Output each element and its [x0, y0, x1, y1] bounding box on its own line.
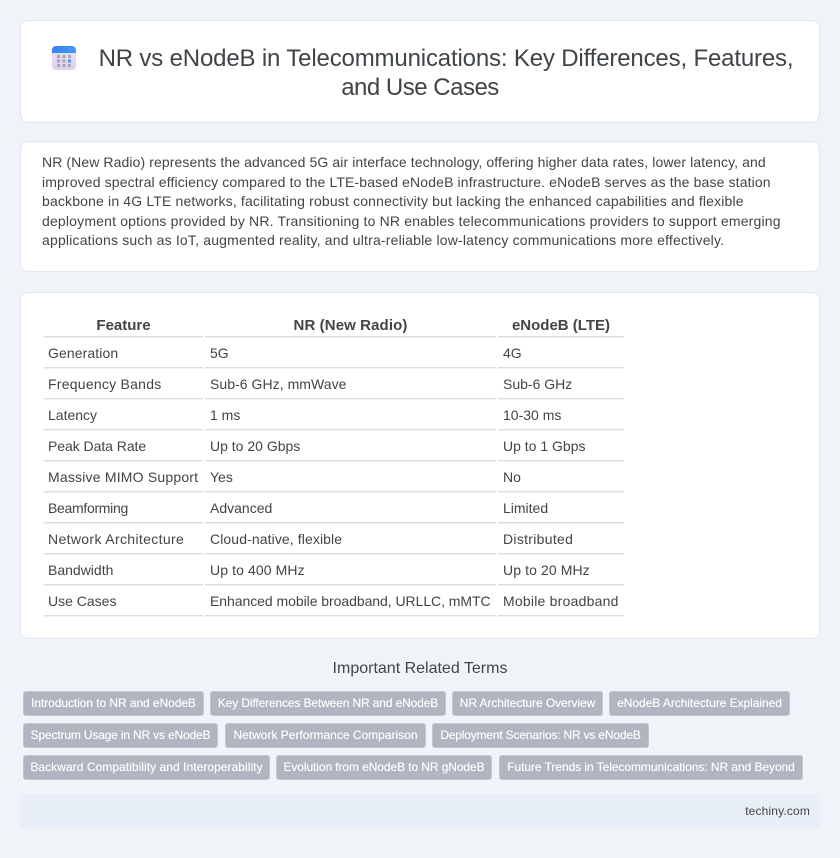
- table rows: Up to 20 MHz: [503, 562, 590, 578]
- table rows: Network Architecture: [48, 531, 184, 547]
- title: and Use Cases: [341, 74, 499, 101]
- related term tags: Spectrum Usage in NR vs eNodeB: [31, 728, 210, 742]
- related term tags: Introduction to NR and eNodeB: [31, 696, 196, 710]
- table rows: Up to 20 Gbps: [210, 438, 300, 454]
- table rows: Beamforming: [48, 500, 128, 516]
- text block: intro paragraph: backbone in 4G LTE networks, facilitating robust connectivity but lacking the enhanced capabilities and flexible: [42, 193, 744, 209]
- related term tags: Network Performance Comparison: [233, 728, 418, 742]
- text block: intro paragraph: deployment options provided by NR. Transitioning to NR enables telecommunications providers to support emerging: [42, 213, 781, 229]
- table rows: Up to 1 Gbps: [503, 438, 586, 454]
- text block: intro paragraph: improved spectral efficiency compared to the LTE-based eNodeB infrastructure. eNodeB serves as the base station: [42, 174, 771, 190]
- table header: Feature: [96, 317, 151, 334]
- text block: intro paragraph: NR (New Radio) represents the advanced 5G air interface technology, offering higher data rates, lower latency, and: [42, 154, 766, 170]
- table rows: Sub-6 GHz, mmWave: [210, 376, 346, 392]
- table rows: Up to 400 MHz: [210, 562, 305, 578]
- table rows: Enhanced mobile broadband, URLLC, mMTC: [210, 593, 491, 609]
- heading: important related terms: Important Related Terms: [333, 660, 507, 677]
- table rows: [44, 336, 624, 617]
- related term tags: NR Architecture Overview: [460, 696, 595, 710]
- title: [99, 45, 793, 101]
- table rows: No: [503, 469, 521, 485]
- table header: [96, 317, 610, 334]
- table rows: Generation: [48, 345, 118, 361]
- table rows: Frequency Bands: [48, 376, 161, 392]
- table rows: Distributed: [503, 531, 573, 547]
- footer credit: techiny.com: [745, 804, 810, 818]
- table rows: Latency: [48, 407, 97, 423]
- footer bar: [20, 794, 820, 828]
- related term tags: Backward Compatibility and Interoperability: [30, 760, 263, 774]
- related term tags: Future Trends in Telecommunications: NR and Beyond: [507, 760, 795, 774]
- table rows: 5G: [210, 345, 229, 361]
- table rows: 1 ms: [210, 407, 240, 423]
- table rows: Peak Data Rate: [48, 438, 146, 454]
- table rows: Limited: [503, 500, 548, 516]
- panel: title header: [20, 20, 820, 123]
- table rows: 4G: [503, 345, 522, 361]
- related term tags: Key Differences Between NR and eNodeB: [218, 696, 438, 710]
- related term tags: eNodeB Architecture Explained: [617, 696, 782, 710]
- table header: NR (New Radio): [294, 317, 407, 334]
- table rows: 10-30 ms: [503, 407, 561, 423]
- table rows: Cloud-native, flexible: [210, 531, 342, 547]
- title: NR vs eNodeB in Telecommunications: Key Differences, Features,: [99, 45, 793, 72]
- table rows: Sub-6 GHz: [503, 376, 572, 392]
- text block: intro paragraph: applications such as IoT, augmented reality, and ultra-reliable low-latency communications more effectively.: [42, 232, 724, 248]
- table rows: Bandwidth: [48, 562, 113, 578]
- table rows: Yes: [210, 469, 233, 485]
- table header: eNodeB (LTE): [512, 317, 610, 334]
- related term tags: Evolution from eNodeB to NR gNodeB: [283, 760, 485, 774]
- table rows: Massive MIMO Support: [48, 469, 198, 485]
- icon: calendar: [52, 46, 76, 70]
- panel: comparison table: [20, 292, 820, 639]
- table rows: Advanced: [210, 500, 272, 516]
- table rows: Use Cases: [48, 593, 116, 609]
- panel: intro text: [20, 141, 820, 272]
- related term tags: Deployment Scenarios: NR vs eNodeB: [440, 728, 641, 742]
- related term tags: [23, 691, 803, 780]
- table rows: Mobile broadband: [503, 593, 619, 609]
- text block: intro paragraph: [42, 154, 781, 248]
